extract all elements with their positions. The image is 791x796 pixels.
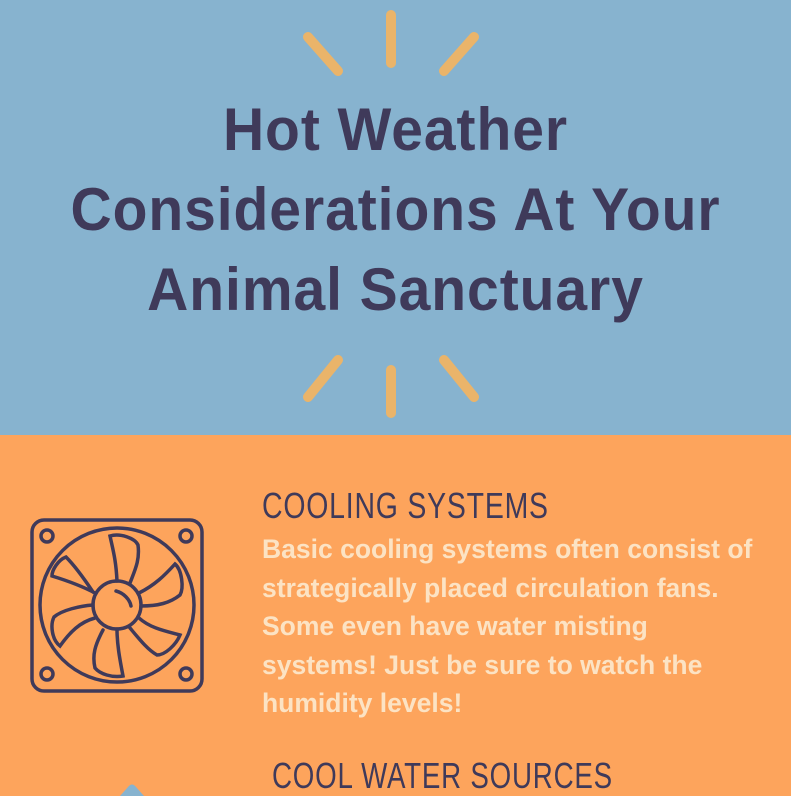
sun rays bottom bbox=[303, 355, 479, 418]
heading: cool water sources: COOL WATER SOURCES bbox=[272, 755, 613, 796]
title: Considerations At Your bbox=[70, 176, 721, 243]
sun rays top bbox=[303, 10, 479, 76]
text: cooling systems: Some even have water misting bbox=[262, 611, 648, 641]
text: cooling systems: Basic cooling systems often consist of bbox=[262, 534, 752, 564]
heading: cooling systems: COOLING SYSTEMS bbox=[262, 485, 549, 526]
title: Hot Weather bbox=[223, 96, 568, 163]
text: cooling systems: strategically placed circulation fans. bbox=[262, 572, 719, 602]
text: cooling systems: systems! Just be sure to watch the bbox=[262, 650, 702, 680]
icon: fan bbox=[30, 518, 204, 693]
title: Animal Sanctuary bbox=[147, 256, 644, 323]
bottom panel bbox=[0, 435, 791, 796]
top panel bbox=[0, 0, 791, 435]
icon: water drop bbox=[120, 784, 144, 796]
text: cooling systems: humidity levels! bbox=[262, 688, 462, 718]
text: cooling systems bbox=[262, 534, 752, 718]
title bbox=[70, 96, 721, 323]
